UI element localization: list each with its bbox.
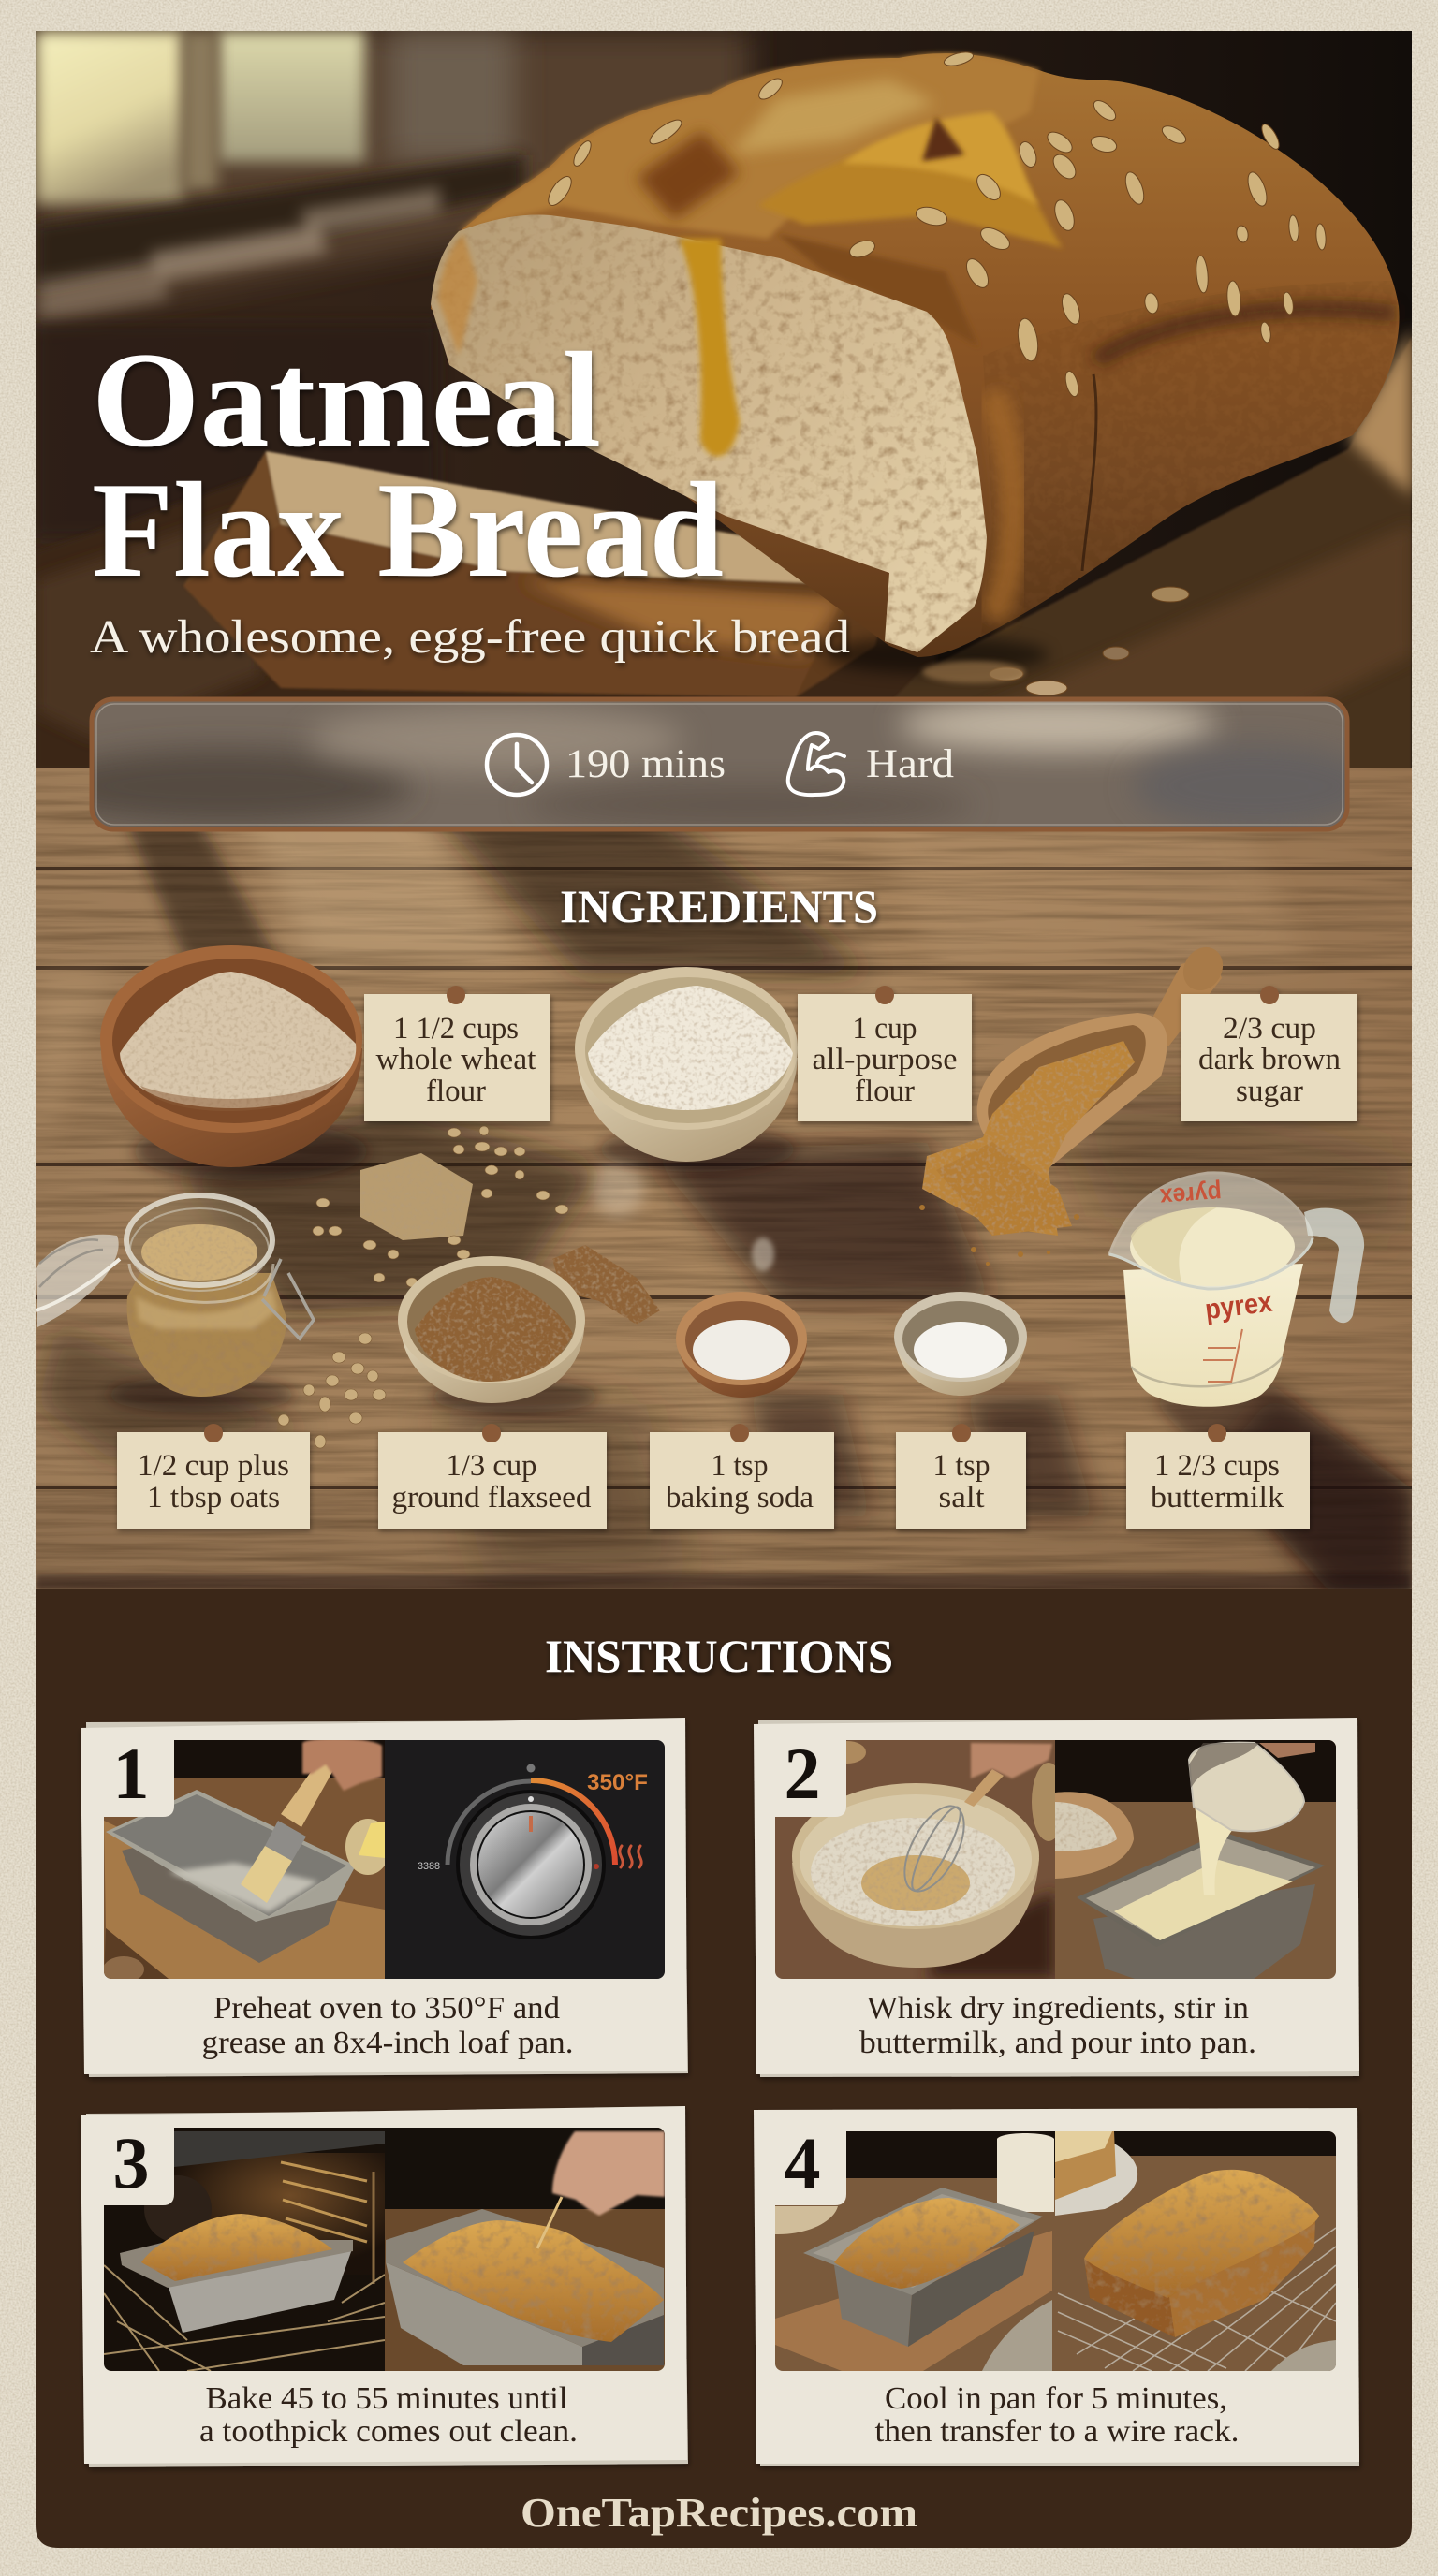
oats on crust xyxy=(544,50,1327,695)
label: buttermilk xyxy=(1126,1424,1310,1529)
title: Oatmeal xyxy=(92,324,601,476)
icon: salt bowl xyxy=(894,1292,1027,1396)
icon: oven dial: 3388 xyxy=(418,1861,440,1872)
caption 1 xyxy=(202,1991,573,2060)
caption 1: Preheat oven to 350°F and xyxy=(213,1991,560,2026)
label: baking soda xyxy=(650,1424,834,1529)
step card 3 xyxy=(81,2106,688,2467)
number tab 4: 4 xyxy=(785,2122,820,2203)
label: dark brown sugar xyxy=(1181,986,1357,1121)
label: buttermilk: 1 2/3 cups xyxy=(1154,1449,1280,1483)
glass info bar xyxy=(37,698,1376,830)
label: ground flaxseed: ground flaxseed xyxy=(391,1481,592,1515)
label: salt: salt xyxy=(938,1481,985,1515)
caption 2: Whisk dry ingredients, stir in xyxy=(867,1991,1249,2026)
step card 1 xyxy=(81,1718,688,2077)
loaf of bread xyxy=(431,53,1400,674)
difficulty: Hard xyxy=(866,742,954,786)
icon: baking soda bowl xyxy=(676,1292,807,1398)
icon: scattered oats xyxy=(278,1126,568,1448)
label: salt xyxy=(896,1424,1026,1529)
label: dark brown sugar: sugar xyxy=(1236,1075,1303,1108)
caption 4: then transfer to a wire rack. xyxy=(874,2414,1240,2449)
icon: flaxseed scatter xyxy=(552,1245,660,1325)
caption 3: Bake 45 to 55 minutes until xyxy=(206,2381,567,2416)
heading: instructions: INSTRUCTIONS xyxy=(545,1630,893,1682)
label: oats: 1/2 cup plus xyxy=(138,1449,289,1483)
icon: ground flaxseed bowl xyxy=(398,1256,599,1413)
label: all-purpose flour xyxy=(798,986,972,1121)
footer website: OneTapRecipes.com xyxy=(521,2490,917,2536)
label: all-purpose flour: 1 cup xyxy=(852,1012,917,1046)
label: whole wheat flour: whole wheat xyxy=(376,1043,536,1076)
step card 2 xyxy=(754,1718,1359,2077)
panel: instructions background xyxy=(36,1589,1412,2548)
title: Flax Bread xyxy=(92,454,724,606)
label: buttermilk: buttermilk xyxy=(1151,1481,1284,1515)
step card 4 xyxy=(754,2108,1359,2466)
label: dark brown sugar: dark brown xyxy=(1198,1043,1341,1076)
number tab 1: 1 xyxy=(112,1733,150,1814)
number tab 4 xyxy=(770,2122,846,2205)
label: oats: 1 tbsp oats xyxy=(147,1481,280,1515)
label: salt: 1 tsp xyxy=(932,1449,990,1483)
caption 3: a toothpick comes out clean. xyxy=(199,2414,578,2449)
bread crumb face xyxy=(431,215,987,652)
icon: pyrex measuring cup of buttermilk: pyrex xyxy=(1159,1179,1223,1211)
label: dark brown sugar: 2/3 cup xyxy=(1223,1012,1316,1046)
label: whole wheat flour: flour xyxy=(426,1075,486,1108)
number tab 3: 3 xyxy=(112,2122,150,2203)
panel: hero photo of bread loaf xyxy=(36,31,1412,770)
icon: pyrex measuring cup of buttermilk xyxy=(1109,1173,1412,1591)
prep time: 190 mins xyxy=(565,742,726,786)
caption 3 xyxy=(199,2381,578,2449)
icon: oats jar xyxy=(36,1195,314,1413)
label: oats xyxy=(117,1424,310,1529)
slice of bread xyxy=(183,451,894,697)
label: whole wheat flour: 1 1/2 cups xyxy=(393,1012,519,1046)
label: ground flaxseed xyxy=(378,1424,607,1529)
heading: ingredients: INGREDIENTS xyxy=(560,880,878,932)
caption 4 xyxy=(874,2381,1240,2449)
icon: oven dial xyxy=(418,1764,648,1939)
label: baking soda: baking soda xyxy=(666,1481,814,1515)
light and shadow bands xyxy=(36,768,1412,1591)
icon: wooden scoop with brown sugar xyxy=(919,940,1230,1266)
caption 1: grease an 8x4-inch loaf pan. xyxy=(202,2026,573,2060)
caption 4: Cool in pan for 5 minutes, xyxy=(885,2381,1227,2416)
label: all-purpose flour: all-purpose xyxy=(813,1043,957,1076)
number tab 3 xyxy=(99,2122,174,2205)
label: baking soda: 1 tsp xyxy=(712,1449,768,1483)
panel: wooden ingredients table xyxy=(36,768,1412,1591)
icon: pyrex measuring cup of buttermilk: pyrex xyxy=(1203,1287,1274,1325)
icon: clock xyxy=(487,735,547,795)
icon: all-purpose flour bowl xyxy=(575,967,798,1172)
number tab 1 xyxy=(99,1733,174,1817)
number tab 2 xyxy=(770,1733,846,1817)
icon: oven dial: 350°F xyxy=(587,1770,648,1795)
subtitle: A wholesome, egg-free quick bread xyxy=(90,611,850,664)
icon: flexed arm xyxy=(788,733,844,795)
caption 2: buttermilk, and pour into pan. xyxy=(859,2026,1256,2060)
title xyxy=(92,324,724,606)
icon: whole wheat flour bowl xyxy=(100,945,368,1181)
label: all-purpose flour: flour xyxy=(855,1075,915,1108)
label: ground flaxseed: 1/3 cup xyxy=(446,1449,537,1483)
caption 2 xyxy=(859,1991,1256,2060)
label: whole wheat flour xyxy=(364,986,550,1121)
number tab 2: 2 xyxy=(785,1733,820,1814)
